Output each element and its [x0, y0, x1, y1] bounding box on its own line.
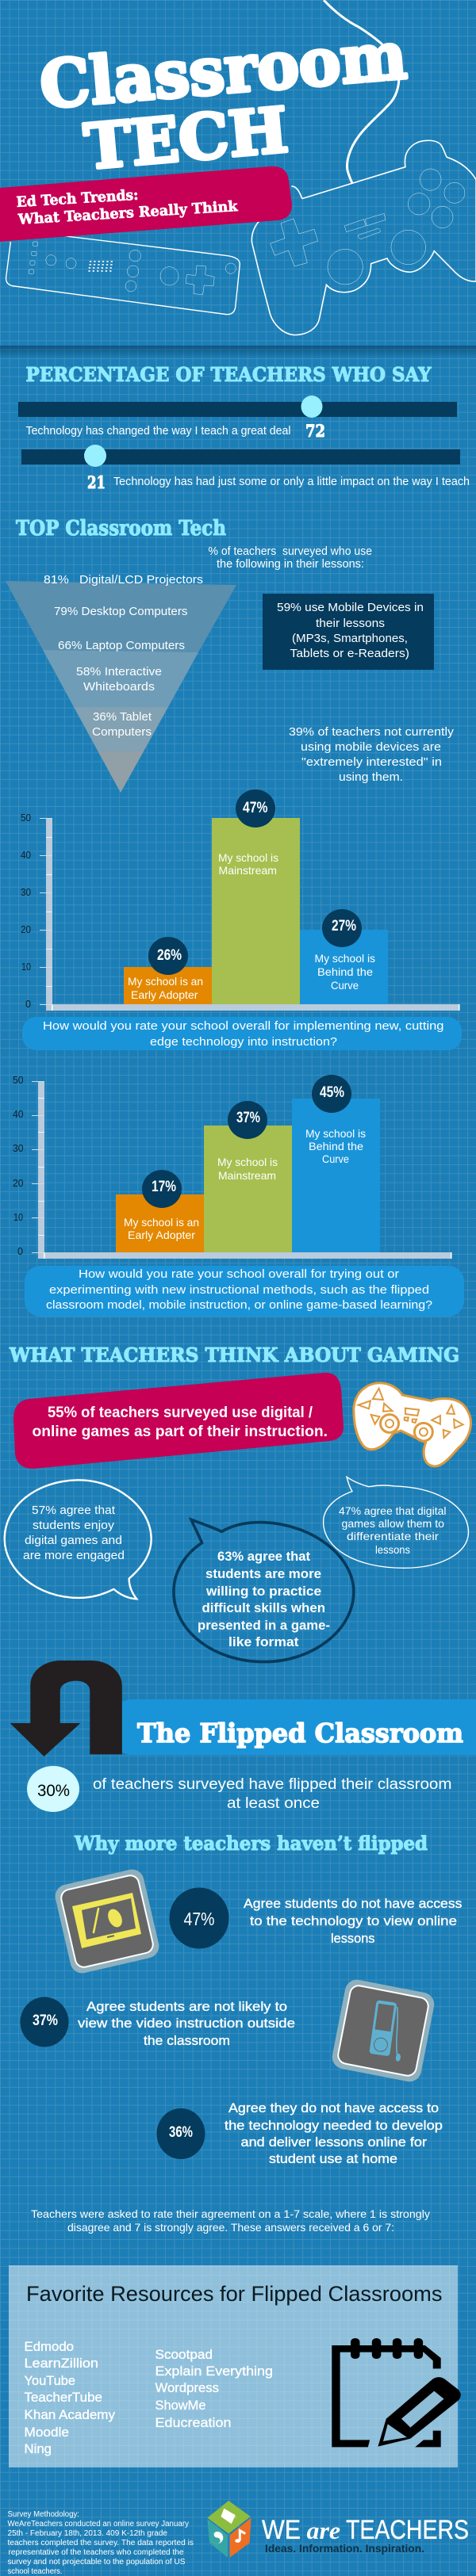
- funnel chart: top classroom tech: [6, 573, 236, 793]
- note: rating scale: Teachers were asked to rate their agreement on a 1-7 scale, where 1 is strongly: [31, 2207, 430, 2220]
- funnel labels: 79% Desktop Computers: [54, 605, 187, 618]
- axes: [13, 1074, 452, 1259]
- stat: 37 percent not likely to view: the classroom: [144, 2034, 230, 2048]
- subtitle text: What Teachers Really Think: [17, 198, 239, 228]
- resource list: column one: Edmodo: [24, 2339, 74, 2354]
- heading: percentage of teachers: PERCENTAGE OF TEACHERS WHO SAY: [25, 363, 432, 386]
- header shadow divider: [0, 346, 476, 358]
- bar: early adopter: 17%: [152, 1179, 176, 1195]
- text: mobile device interest: [289, 725, 455, 784]
- question pill: instructional methods: experimenting with new instructional methods, such as the flipped: [49, 1283, 429, 1297]
- stat: 36 percent no technology access: student use at home: [269, 2152, 397, 2166]
- speech bubble: 57 percent: are more engaged: [23, 1549, 125, 1562]
- speech bubble: 57 percent: digital games and: [25, 1534, 122, 1547]
- text: mobile device interest: using mobile devices are: [301, 740, 441, 754]
- survey methodology: [8, 2510, 194, 2576]
- speech bubble: 47 percent: lessons: [375, 1543, 410, 1556]
- speech bubble: 47 percent: [324, 1477, 469, 1568]
- bar: early adopter: My school is an: [124, 1216, 199, 1229]
- callout: mobile devices: Tablets or e-Readers): [290, 647, 409, 660]
- icon: gamepad: [354, 1383, 471, 1466]
- speech bubble: 63 percent: presented in a game-: [198, 1618, 330, 1633]
- heading: why more teachers have not flipped: Why more teachers haven’t flipped: [74, 1832, 428, 1855]
- axes: 40: [21, 849, 31, 861]
- stat: 30 percent flipped: 30%: [37, 1782, 70, 1800]
- stat: 47 percent no access: lessons: [331, 1932, 374, 1946]
- bar: behind the curve: [300, 909, 388, 1004]
- speech bubble: 63 percent: like format: [228, 1634, 299, 1649]
- banner: the flipped classroom: The Flipped Classroom: [137, 1718, 463, 1749]
- icon: notepad and pencil: [332, 2338, 461, 2447]
- question pill: implementing technology: edge technology into instruction?: [150, 1035, 337, 1049]
- logo cube: [207, 2501, 251, 2558]
- subtitle text: Ed Tech Trends:: [16, 187, 139, 211]
- title: Classroom: [37, 17, 409, 124]
- resource list: column two: Explain Everything: [155, 2364, 273, 2379]
- resource list: column one: YouTube: [24, 2373, 75, 2388]
- axes: 30: [13, 1142, 24, 1154]
- survey methodology: Survey Methodology:: [8, 2510, 79, 2519]
- resource list: column two: ShowMe: [155, 2398, 206, 2413]
- funnel labels: [44, 573, 203, 739]
- slider: 21 percent: 21: [87, 472, 106, 492]
- banner: the flipped classroom: [119, 1699, 476, 1755]
- question pill: implementing technology: [22, 1017, 462, 1050]
- resource list: column two: Wordpress: [155, 2380, 219, 2395]
- bar: mainstream: Mainstream: [218, 1169, 276, 1182]
- axes: 0: [25, 998, 31, 1010]
- slider: 72 percent: [18, 396, 457, 441]
- speech bubble: 57 percent: 57% agree that: [32, 1504, 116, 1517]
- stat: 37 percent not likely to view: [21, 1997, 295, 2048]
- bar: behind the curve: Behind the: [317, 965, 373, 978]
- bar chart: implementing new technology: [21, 789, 460, 1011]
- stat: 37 percent not likely to view: Agree students are not likely to: [86, 2000, 287, 2014]
- survey methodology: teachers completed the survey. The data reported is: [8, 2539, 194, 2547]
- resource list: column one: Moodle: [24, 2425, 69, 2440]
- axes: 20: [21, 923, 31, 935]
- funnel labels: Computers: [92, 725, 152, 739]
- axes: 40: [13, 1108, 24, 1120]
- bar: behind the curve: Curve: [322, 1152, 349, 1165]
- slider: 21 percent: Technology has had just some or only a little impact on the way I teach: [113, 475, 470, 488]
- slider: 72 percent: 72: [305, 421, 325, 441]
- stat: 47 percent no access: 47%: [184, 1909, 214, 1929]
- axes: 30: [21, 886, 31, 898]
- slider: 21 percent: [21, 445, 470, 492]
- face buttons: [271, 169, 465, 285]
- icon: tablet: [53, 1867, 161, 1975]
- bar: early adopter: My school is an: [128, 975, 203, 988]
- speech bubble: 63 percent: willing to practice: [205, 1584, 321, 1599]
- resource list: column two: [155, 2347, 273, 2430]
- funnel intro text: the following in their lessons:: [217, 557, 364, 571]
- resource list: column one: Khan Academy: [24, 2407, 115, 2422]
- resource list: column one: Ning: [24, 2441, 52, 2456]
- logo: we are teachers: [207, 2501, 469, 2558]
- subtitle text: [16, 181, 239, 228]
- stat: 36 percent no technology access: [157, 2101, 443, 2166]
- question pill: instructional methods: classroom model, mobile instruction, or online game-based learning?: [46, 1298, 432, 1312]
- stat: 36 percent no technology access: Agree they do not have access to: [228, 2101, 439, 2115]
- bar: mainstream: 37%: [236, 1110, 260, 1126]
- callout: 55 percent use games: online games as part of their instruction.: [32, 1424, 328, 1440]
- axes: 10: [21, 961, 31, 973]
- funnel intro text: [208, 545, 372, 571]
- bar: early adopter: Early Adopter: [131, 988, 198, 1001]
- survey methodology: school teachers.: [8, 2567, 62, 2576]
- heading: top classroom tech: TOP Classroom Tech: [16, 517, 226, 541]
- callout: 55 percent use games: 55% of teachers surveyed use digital /: [48, 1405, 313, 1421]
- callout: mobile devices: [263, 594, 434, 670]
- logo wordmark: WE: [262, 2515, 301, 2545]
- panel heading: Favorite Resources for Flipped Classrooms: [26, 2282, 443, 2306]
- stat: 30 percent flipped: [27, 1766, 452, 1812]
- note: rating scale: [31, 2207, 430, 2234]
- bar: behind the curve: [292, 1075, 380, 1252]
- axes: 10: [13, 1211, 23, 1223]
- bar: early adopter: [124, 937, 212, 1004]
- bar: behind the curve: Curve: [331, 979, 359, 992]
- bar: mainstream: [212, 789, 300, 1004]
- text: mobile device interest: "extremely interested" in: [301, 755, 442, 769]
- axes: 0: [17, 1245, 23, 1257]
- bar: behind the curve: 45%: [320, 1084, 344, 1101]
- title: TECH: [82, 94, 291, 184]
- title: [37, 17, 409, 184]
- stat: 47 percent no access: Agree students do not have access: [244, 1897, 462, 1911]
- callout: 55 percent use games: [13, 1373, 344, 1469]
- bar: early adopter: Early Adopter: [128, 1229, 195, 1241]
- question pill: instructional methods: How would you rate your school overall for trying out or: [79, 1267, 399, 1281]
- callout: mobile devices: (MP3s, Smartphones,: [292, 632, 408, 645]
- survey methodology: 25th - February 18th, 2013. 409 K-12th grade: [8, 2529, 167, 2538]
- bar: mainstream: Mainstream: [219, 864, 277, 877]
- survey methodology: representative of the teachers who completed the: [8, 2548, 184, 2557]
- funnel labels: Whiteboards: [83, 680, 155, 694]
- bar: early adopter: [116, 1170, 204, 1252]
- funnel labels: 66% Laptop Computers: [58, 639, 185, 652]
- game controller cable: [324, 0, 399, 183]
- logo wordmark: are: [306, 2517, 340, 2544]
- axes: 50: [13, 1074, 24, 1086]
- question pill: instructional methods: [25, 1266, 464, 1317]
- stat: 30 percent flipped: of teachers surveyed have flipped their classroom: [93, 1776, 452, 1793]
- speech bubble: 47 percent: 47% agree that digital: [339, 1504, 446, 1517]
- survey methodology: survey and not projectable to the population of US: [8, 2558, 186, 2566]
- panel: favorite resources: [9, 2265, 461, 2467]
- speech bubble: 63 percent: difficult skills when: [202, 1600, 325, 1615]
- bar: mainstream: My school is: [218, 851, 278, 864]
- axes: [21, 812, 460, 1011]
- callout: mobile devices: 59% use Mobile Devices in: [277, 601, 424, 614]
- funnel intro text: % of teachers surveyed who use: [208, 545, 372, 558]
- logo wordmark: [262, 2515, 469, 2555]
- bar: behind the curve: 27%: [332, 918, 356, 934]
- bar: mainstream: My school is: [217, 1156, 278, 1168]
- funnel labels: 36% Tablet: [93, 710, 152, 724]
- speech bubble: 47 percent: games allow them to: [341, 1517, 444, 1530]
- bar: behind the curve: My school is: [314, 952, 375, 965]
- slider: 72 percent: Technology has changed the way I teach a great deal: [25, 424, 290, 438]
- icon: mp3 player: [330, 1978, 436, 2084]
- speech bubble: 57 percent: students enjoy: [33, 1519, 115, 1532]
- speech bubble: 47 percent: differentiate their: [347, 1530, 439, 1542]
- resource list: column one: LearnZillion: [24, 2356, 98, 2371]
- note: rating scale: disagree and 7 is strongly agree. These answers received a 6 or 7:: [67, 2221, 394, 2234]
- question pill: implementing technology: How would you rate your school overall for implementing new, cutting: [43, 1019, 444, 1033]
- bar chart: new instructional methods: [13, 1074, 452, 1259]
- survey methodology: WeAreTeachers conducted an online survey January: [8, 2520, 189, 2528]
- bar: behind the curve: Behind the: [309, 1140, 363, 1152]
- stat: 30 percent flipped: at least once: [227, 1795, 320, 1812]
- funnel labels: 81% Digital/LCD Projectors: [44, 573, 203, 587]
- bar: behind the curve: My school is: [305, 1127, 366, 1140]
- logo wordmark: Ideas. Information. Inspiration.: [265, 2542, 424, 2555]
- text: mobile device interest: using them.: [339, 770, 403, 784]
- bar: mainstream: [204, 1101, 292, 1252]
- axes: 20: [13, 1177, 24, 1189]
- speech bubble: 63 percent: 63% agree that: [217, 1549, 310, 1564]
- speech bubble: 57 percent: [5, 1480, 152, 1599]
- stat: 37 percent not likely to view: view the video instruction outside: [78, 2016, 295, 2031]
- resource list: column one: [24, 2339, 115, 2456]
- callout: mobile devices: their lessons: [316, 617, 385, 630]
- speech bubble: 63 percent: students are more: [205, 1566, 321, 1581]
- stat: 36 percent no technology access: the technology needed to develop: [225, 2119, 443, 2133]
- text: mobile device interest: 39% of teachers not currently: [289, 725, 455, 739]
- funnel labels: 58% Interactive: [76, 665, 162, 678]
- stat: 36 percent no technology access: 36%: [169, 2124, 193, 2141]
- stat: 36 percent no technology access: and deliver lessons online for: [241, 2135, 428, 2150]
- heading: gaming: WHAT TEACHERS THINK ABOUT GAMING: [9, 1343, 459, 1366]
- icon: u-turn arrow: [10, 1661, 122, 1756]
- resource list: column one: TeacherTube: [24, 2390, 102, 2405]
- stat: 47 percent no access: [170, 1888, 462, 1948]
- ribbon: subtitle: [0, 166, 292, 242]
- axes: 50: [21, 812, 31, 824]
- bar: mainstream: 47%: [243, 800, 268, 816]
- resource list: column two: Educreation: [155, 2415, 232, 2430]
- illustration: Wii remote outline: [6, 236, 240, 315]
- resource list: column two: Scootpad: [155, 2347, 213, 2362]
- stat: 37 percent not likely to view: 37%: [33, 2012, 58, 2029]
- bar: early adopter: 26%: [157, 947, 182, 964]
- speech bubble: 63 percent: [174, 1519, 354, 1662]
- stat: 47 percent no access: to the technology to view online: [250, 1914, 457, 1928]
- illustration: game controller outline: [251, 140, 476, 335]
